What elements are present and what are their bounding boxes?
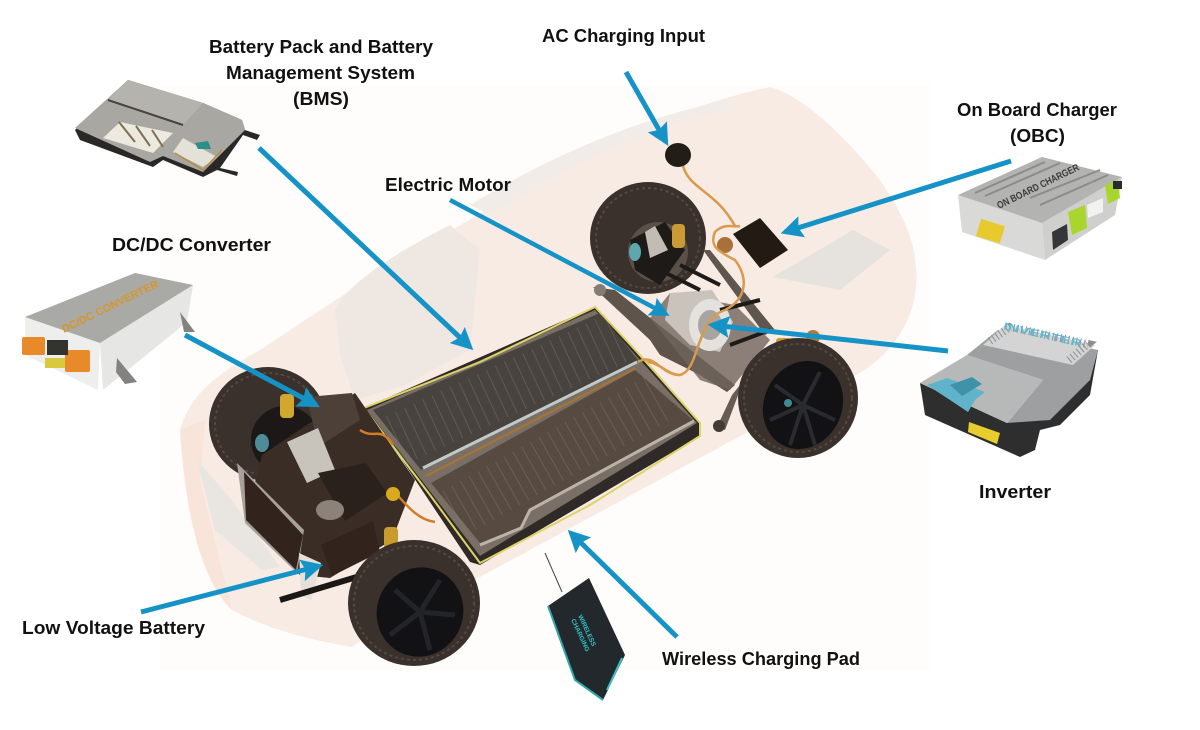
battery pack component [75, 80, 260, 177]
arrow: wireless charging [571, 533, 677, 637]
on-board charger component [958, 157, 1122, 260]
label: battery pack [209, 37, 433, 109]
arrow: low voltage battery [141, 566, 319, 612]
DC/DC converter component: DC/DC CONVERTER [60, 278, 161, 336]
rear right wheel [738, 338, 858, 462]
label: on board charger [957, 100, 1117, 146]
car body [160, 85, 930, 670]
wireless charging pad component: CHARGING [569, 618, 590, 653]
label: inverter: Inverter [979, 482, 1051, 502]
label: low voltage battery: Low Voltage Battery [22, 618, 205, 638]
battery orange cable [638, 359, 680, 375]
label: on board charger: On Board Charger [957, 100, 1117, 120]
label: wireless charging pad: Wireless Charging Pad [662, 649, 860, 669]
label: on board charger: (OBC) [1010, 126, 1065, 146]
arrow: on-board charger [785, 161, 1011, 232]
wireless charging pad component: WIRELESS [576, 614, 597, 648]
wireless charging pad component [545, 553, 625, 700]
inverter component [920, 321, 1098, 457]
label: battery pack: (BMS) [293, 89, 349, 109]
rear left wheel [590, 182, 706, 294]
AC charging input and cable [665, 143, 735, 226]
arrow: battery pack [259, 148, 470, 347]
front right wheel [348, 540, 480, 671]
label: DC/DC converter: DC/DC Converter [112, 235, 271, 255]
label: electric motor: Electric Motor [385, 175, 511, 195]
front chassis [237, 393, 435, 600]
on-board charger component: ON BOARD CHARGER [995, 162, 1082, 212]
label: battery pack: Management System [226, 63, 415, 83]
front left wheel [209, 367, 327, 481]
on-board charger in car [733, 218, 788, 268]
label: AC charging input: AC Charging Input [542, 26, 705, 46]
arrow: AC charging [626, 72, 666, 142]
DC/DC converter component [22, 273, 195, 390]
arrow: DC/DC converter [185, 335, 316, 405]
arrow: inverter [712, 325, 948, 351]
arrow: electric motor [450, 200, 666, 314]
inverter component: INVERTER [1002, 321, 1084, 350]
rear chassis and motor [593, 226, 820, 432]
label: battery pack: Battery Pack and Battery [209, 37, 433, 57]
battery pack in car [364, 307, 700, 565]
